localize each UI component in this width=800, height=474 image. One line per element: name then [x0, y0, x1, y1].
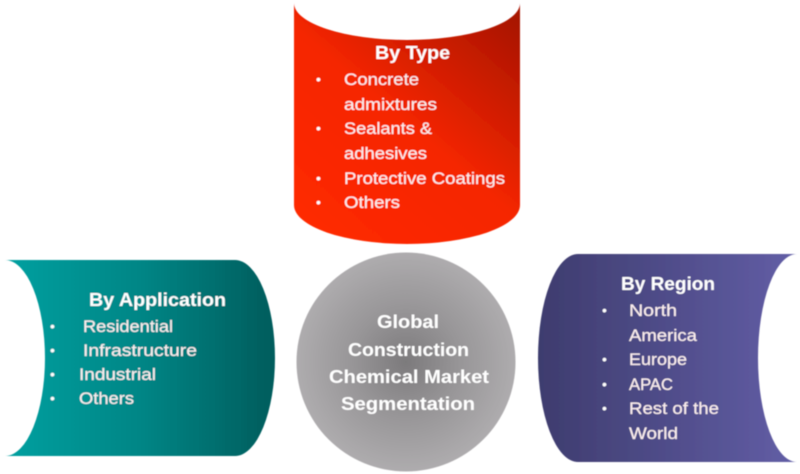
panel: center circle [296, 252, 516, 472]
list: type items: Protective Coatings [344, 170, 505, 188]
list: region items: Rest of the [629, 400, 719, 418]
list: region items: APAC [629, 376, 673, 394]
heading: by region: By Region [621, 274, 715, 294]
list: region items: Europe [629, 351, 687, 369]
list: type items [316, 71, 505, 212]
title: global construction chemical market segmentation [329, 312, 489, 414]
panel: by type [294, 3, 520, 244]
list: application items: • [50, 366, 55, 382]
list: application items: • [50, 342, 55, 358]
list: application items [50, 318, 197, 408]
list: type items: Concrete [344, 71, 419, 89]
title: global construction chemical market segmentation: Chemical Market [329, 367, 489, 387]
title: global construction chemical market segmentation: Global [377, 312, 439, 332]
list: application items: Industrial [79, 366, 156, 384]
list: region items: • [602, 376, 607, 392]
list: application items: • [50, 390, 55, 406]
purple curved shape [538, 254, 797, 462]
grey circle [296, 252, 516, 472]
list: application items: Infrastructure [83, 342, 197, 360]
heading: by application: By Application [89, 290, 226, 310]
list: type items: admixtures [344, 96, 437, 114]
list: region items: North [629, 302, 677, 320]
list: region items: America [629, 327, 698, 345]
teal curved shape [5, 260, 275, 456]
list: application items: • [50, 318, 55, 334]
list: region items: • [602, 400, 607, 416]
list: region items: • [602, 302, 607, 318]
title: global construction chemical market segmentation: Construction [348, 340, 469, 360]
list: type items: Others [344, 194, 400, 212]
list: region items [602, 302, 719, 443]
list: type items: Sealants & [344, 120, 432, 138]
list: application items: Residential [83, 318, 173, 336]
panel: by region [538, 254, 797, 462]
list: type items: • [316, 194, 321, 210]
list: type items: • [316, 170, 321, 186]
list: application items: Others [79, 390, 134, 408]
list: type items: adhesives [344, 145, 427, 163]
list: type items: • [316, 120, 321, 136]
panel: by application [5, 260, 275, 456]
list: type items: • [316, 71, 321, 87]
title: global construction chemical market segmentation: Segmentation [341, 394, 475, 414]
list: region items: • [602, 351, 607, 367]
red cylinder shape [294, 3, 520, 244]
heading: by type: By Type [375, 43, 450, 63]
list: region items: World [629, 425, 678, 443]
